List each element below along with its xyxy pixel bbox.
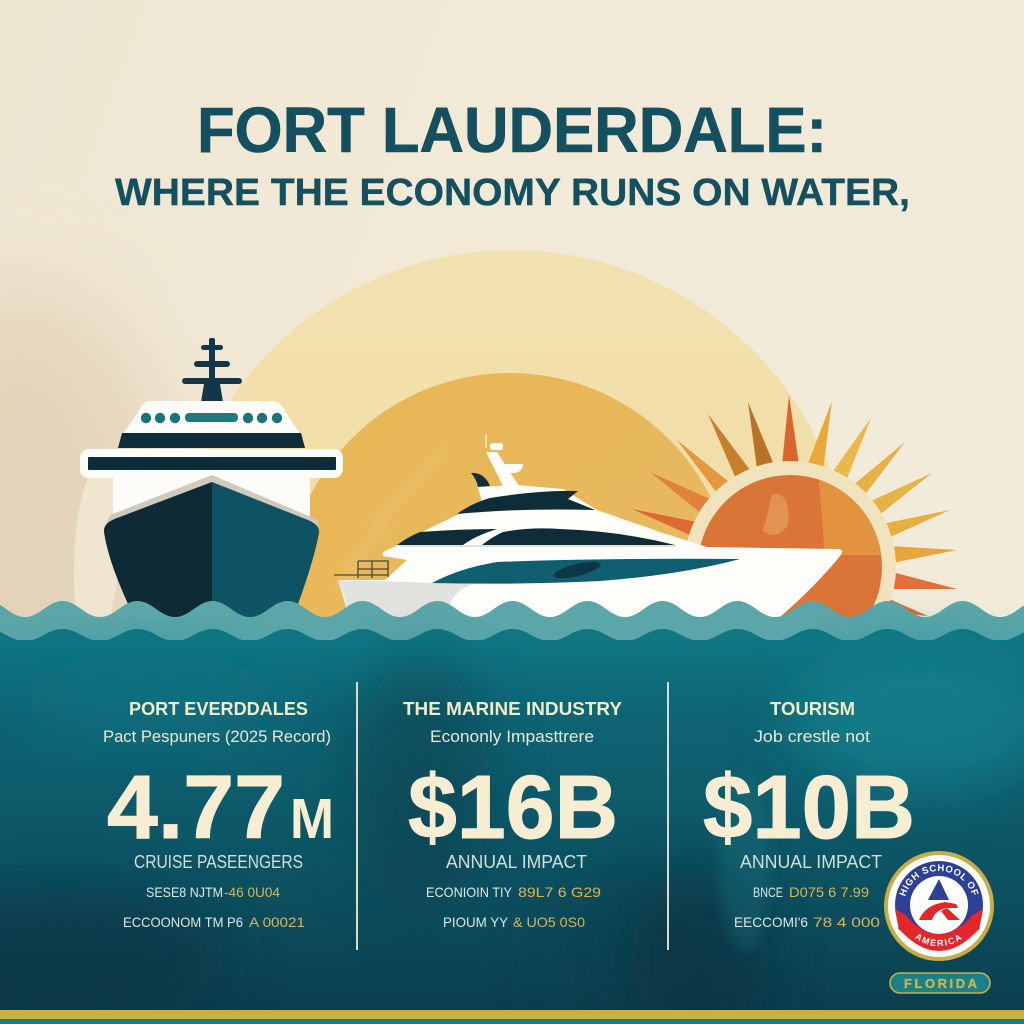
detail line 2: A 00021 [249,914,305,930]
water panel [0,640,1024,1024]
detail line 1 [146,884,280,900]
yacht railing [334,561,388,578]
divider right [667,682,669,950]
big number: $10B [703,758,915,858]
waves [0,601,1024,645]
title: FORT LAUDERDALE: [197,94,827,166]
badge ribbon lettering: AMERICA [914,934,962,946]
badge lettering: HIGH SCHOOL OF [899,864,979,896]
panel: marine industry [403,699,622,930]
title [115,94,910,214]
detail line 1: ECONIOIN TIY [426,884,513,900]
detail line 2: ECCOONOM TM P6 [123,914,243,930]
icon: yacht [334,434,842,620]
badge ribbon [895,909,983,951]
heading: TOURISM [770,699,855,719]
icon: sun with rays [632,396,957,617]
big number: 4.77 [107,758,285,858]
label: ANNUAL IMPACT [740,852,882,872]
subheading: Job crestle not [754,727,870,746]
yacht windows [397,491,675,545]
detail line 2 [443,914,585,930]
subheading: Econonly Impasttrere [430,727,594,746]
panel: tourism [703,699,915,930]
ship mast [182,338,242,402]
detail line 2: PIOUM YY [443,914,509,930]
detail line 1 [753,884,869,900]
badge: florida [890,973,990,993]
yacht stern shade [338,580,473,620]
icon: cruise ship [80,338,343,625]
ship deck [80,449,343,478]
badge: high school of america [884,851,994,961]
detail line 1: D075 6 7.99 [789,884,869,900]
sun backdrop circles [74,250,852,930]
detail line 2: EECCOMI'6 [734,914,808,930]
yacht mast [471,434,523,487]
badge: florida: FLORIDA [904,976,978,991]
ship hull [104,475,318,528]
divider left [356,682,358,950]
panel: port everdales [103,699,334,930]
detail line 1: SESE8 NJTM [146,884,223,900]
subheading: Pact Pespuners (2025 Record) [103,727,331,746]
yacht hull [338,485,842,620]
badge emblem [919,879,960,920]
detail line 2 [734,914,880,930]
detail line 2: & UO5 0S0 [513,914,585,930]
label: CRUISE PASEENGERS [134,852,303,872]
detail line 2: 78 4 000 [813,914,880,930]
detail line 1: BNCE [753,884,783,900]
heading: THE MARINE INDUSTRY [403,699,622,719]
detail line 1: 89L7 6 G29 [518,884,601,900]
ship superstructure [123,401,300,434]
ship windows [141,413,282,423]
title: WHERE THE ECONOMY RUNS ON WATER, [115,172,910,214]
footer stripes [0,1010,1024,1024]
yacht teal stripe [432,559,740,584]
detail line 1 [426,884,601,900]
big number: $16B [408,758,618,858]
unit: M [290,787,334,851]
label: ANNUAL IMPACT [446,852,587,872]
detail line 1: -46 0U04 [224,884,280,900]
heading: PORT EVERDDALES [129,699,308,719]
